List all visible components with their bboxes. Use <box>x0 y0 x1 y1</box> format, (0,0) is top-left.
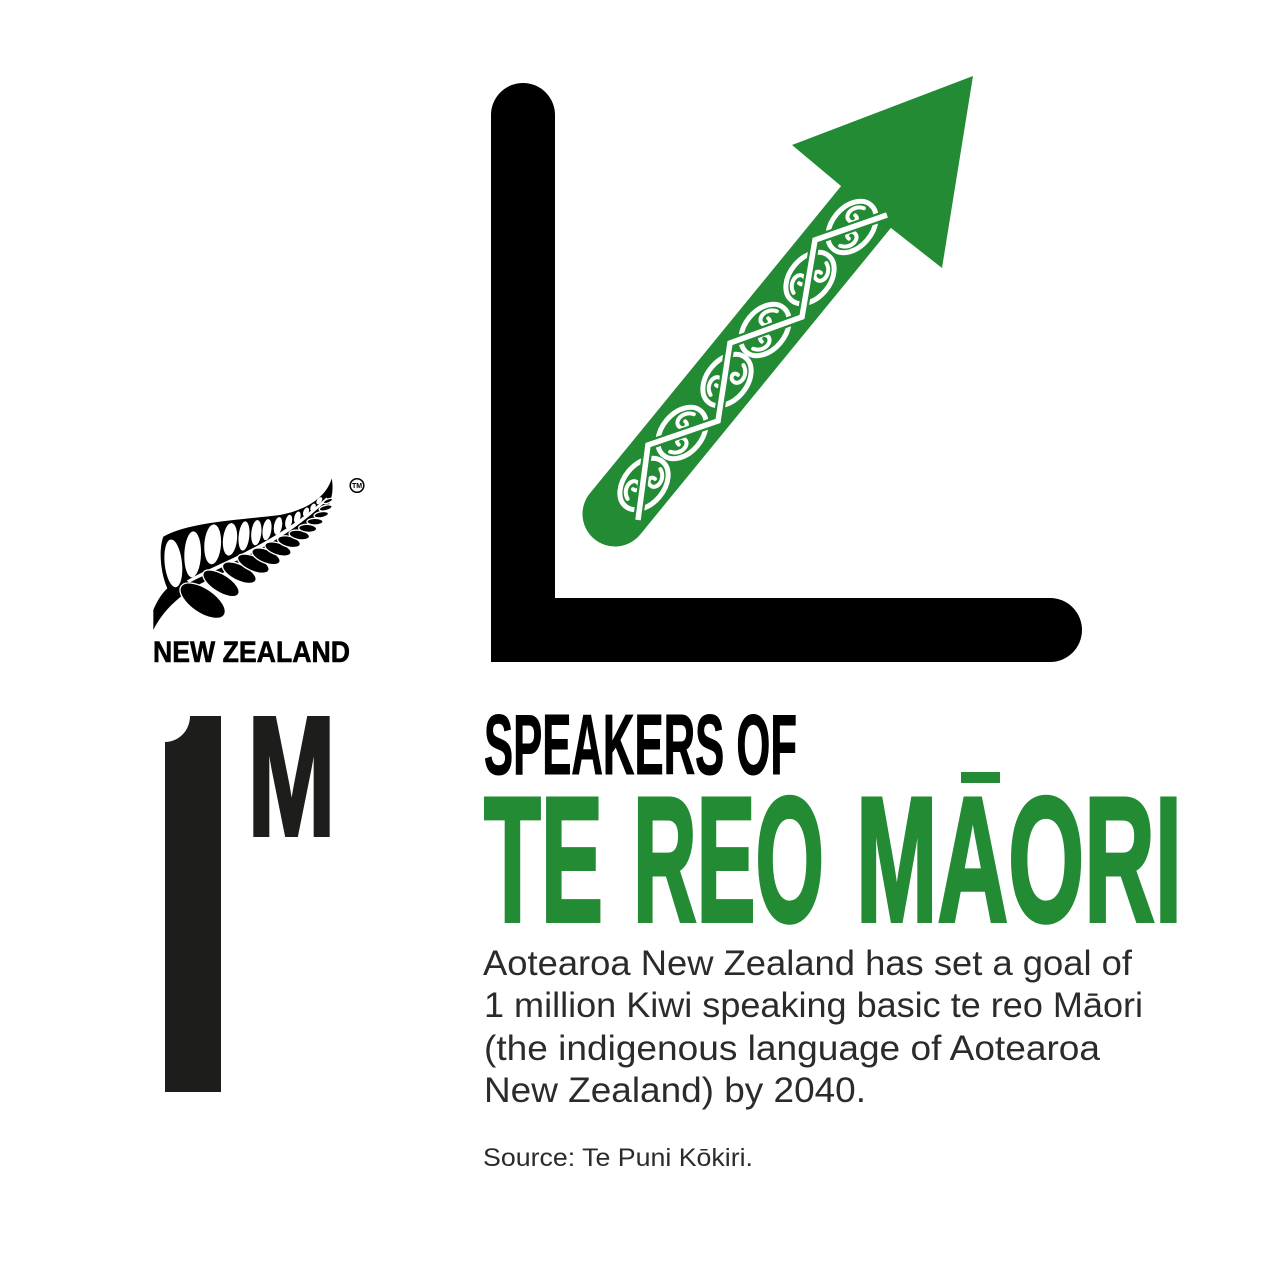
source note: Source: Te Puni Kōkiri. <box>483 1144 753 1172</box>
chart axes <box>491 83 1082 662</box>
big number: 1M <box>165 716 330 1092</box>
body text: New Zealand) by 2040. <box>484 1071 866 1110</box>
heading: te reo Māori <box>484 760 1182 959</box>
logo wordmark: NEW ZEALAND <box>153 636 350 669</box>
heading: te reo Māori: TE <box>484 760 603 959</box>
numeral 1: 1 <box>58 586 307 1211</box>
koru pattern <box>610 192 887 520</box>
body text <box>483 944 1143 1110</box>
body text: (the indigenous language of Aotearoa <box>484 1029 1101 1068</box>
logo: New Zealand fern mark <box>153 478 364 669</box>
icon: silver fern <box>153 478 333 630</box>
unit M: M <box>248 682 336 872</box>
body text: 1 million Kiwi speaking basic te reo Māori <box>484 986 1143 1025</box>
growth arrow <box>610 76 973 520</box>
trademark symbol: TM <box>352 483 362 490</box>
body text: Aotearoa New Zealand has set a goal of <box>483 944 1132 983</box>
arrow head <box>792 76 973 268</box>
trademark symbol <box>350 479 364 492</box>
heading: speakers of: SPEAKERS OF <box>484 698 797 793</box>
heading: te reo Māori: REO <box>633 760 824 959</box>
arrow shaft <box>615 207 866 514</box>
